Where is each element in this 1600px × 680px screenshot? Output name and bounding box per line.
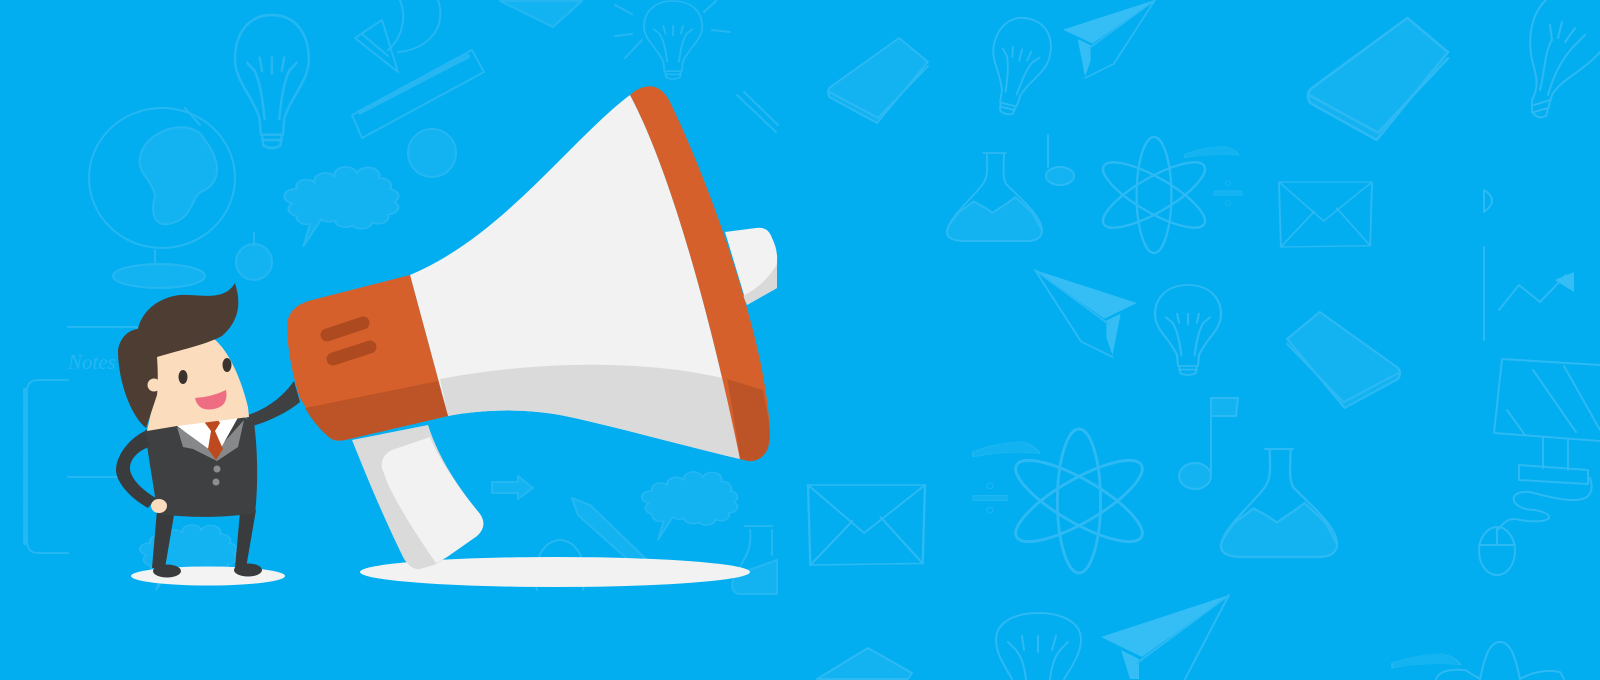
lapels: [177, 420, 244, 461]
megaphone shadow: [360, 557, 750, 587]
doodles: right background pattern: [808, 0, 1600, 679]
handle: [352, 425, 483, 569]
shoes: [153, 564, 262, 578]
man shadow: [131, 566, 285, 586]
horn: [410, 95, 740, 459]
doodle: arrow: [355, 0, 440, 72]
hair: [118, 283, 238, 428]
doodle: cloud behind man: [140, 525, 237, 590]
doodle: divide sign lower: [973, 483, 1007, 513]
doodle: small flask: [236, 233, 272, 280]
doodle: bottom atom: [1436, 642, 1564, 679]
doodle: feather lower: [973, 442, 1040, 457]
doodle: large envelope: [808, 485, 925, 565]
left arm: [116, 431, 156, 508]
megaphone: [287, 86, 777, 569]
doodle: music note: [1046, 135, 1074, 185]
doodle: bulb with rays: [615, 1, 730, 79]
ear: [148, 378, 160, 392]
doodle: notebook: Notes: [67, 350, 116, 374]
doodle: mirrored book: [1287, 312, 1400, 408]
doodle: pencil: [737, 92, 778, 132]
tie: [205, 420, 223, 460]
doodle: cropped bulb: [1530, 0, 1600, 117]
doodle: book: [828, 38, 928, 123]
doodle: left bulb: [235, 15, 309, 148]
doodle: note with flag: [1179, 398, 1238, 489]
doodle: cloud: [284, 167, 398, 246]
doodle: apple: [408, 129, 456, 177]
doodle: lower flask: [732, 526, 777, 594]
suit jacket: [145, 415, 257, 517]
doodle: envelope: [1279, 182, 1372, 247]
doodles: left background pattern: [25, 0, 778, 594]
doodle: light bulb: [978, 12, 1057, 121]
doodle: feather: [1185, 146, 1239, 158]
doodle: large flask: [1221, 449, 1337, 557]
doodle: bottom bulb: [996, 613, 1081, 679]
rear grip: [725, 228, 777, 305]
face: [147, 338, 249, 431]
mouthpiece body: [287, 275, 448, 441]
doodle: paper plane: [1063, 0, 1155, 78]
doodle: large atom: [1006, 429, 1152, 573]
doodle: bottom book: [817, 648, 912, 679]
doodle: fountain pen: [572, 498, 647, 566]
doodle: flask: [947, 153, 1042, 241]
eyes: [178, 358, 232, 384]
doodle: atom: [1095, 137, 1213, 253]
doodle: top book: [500, 1, 582, 27]
horn rim: [630, 86, 770, 461]
doodle: divide sign: [1214, 181, 1242, 205]
doodle: partial bulb: [535, 540, 585, 590]
doodle: globe: [89, 108, 235, 288]
businessman: [116, 283, 300, 578]
doodle: small arrow: [492, 476, 533, 499]
shirt: [177, 414, 240, 455]
doodle: bottom plane: [1101, 595, 1229, 679]
doodle: bottom feather: [1392, 654, 1461, 668]
raised arm: [245, 381, 300, 426]
doodle: notebook: [25, 327, 137, 553]
right leg: [235, 510, 256, 568]
doodle: ruler: [352, 50, 484, 138]
doodle: large book: [1308, 18, 1448, 140]
doodle: monitor and mouse: [1479, 359, 1600, 575]
doodle: chart: [1484, 190, 1574, 340]
doodle: plane mirrored: [1035, 270, 1137, 357]
buttons: [212, 466, 220, 486]
mouth: [195, 390, 226, 410]
doodle: lower cloud: [642, 472, 738, 540]
doodle: lower bulb: [1155, 285, 1221, 375]
mouthpiece slots: [327, 323, 370, 359]
left leg: [152, 510, 174, 568]
hand: [151, 499, 167, 513]
